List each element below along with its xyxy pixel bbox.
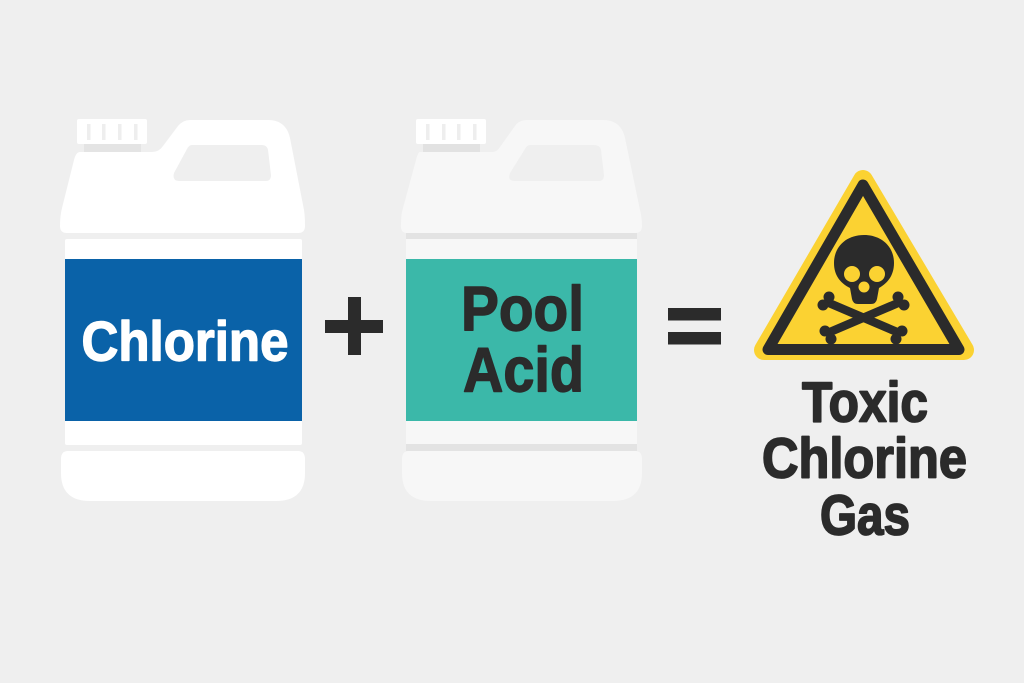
caption: Toxic Chlorine Gas: Chlorine <box>762 426 967 490</box>
caption: Toxic Chlorine Gas: Toxic <box>802 370 928 434</box>
jug upper body with handle <box>401 120 642 233</box>
jug base <box>61 451 305 501</box>
jug base <box>402 451 642 501</box>
icon: toxic warning triangle <box>764 180 964 350</box>
pool acid label <box>406 259 637 421</box>
icon: crossbones <box>818 292 910 344</box>
caption: Toxic Chlorine Gas <box>762 370 967 548</box>
equals sign <box>668 308 721 344</box>
caption: Toxic Chlorine Gas: Gas <box>820 484 910 548</box>
jug: chlorine <box>60 119 305 501</box>
jug: pool acid <box>401 119 642 501</box>
label text: Pool Acid: Acid <box>463 336 584 406</box>
jug upper body with handle <box>60 120 305 233</box>
icon: skull <box>834 235 894 304</box>
jug cap <box>416 119 486 152</box>
plus sign <box>325 297 383 355</box>
neck shadow bands <box>406 233 637 451</box>
label text: Pool Acid: Pool <box>461 274 584 344</box>
label text: Chlorine: Chlorine <box>82 310 288 372</box>
jug label backing <box>406 239 637 444</box>
jug label backing <box>65 239 302 445</box>
jug cap <box>77 119 147 152</box>
label text: Pool Acid <box>461 274 584 406</box>
chlorine label <box>65 259 302 421</box>
